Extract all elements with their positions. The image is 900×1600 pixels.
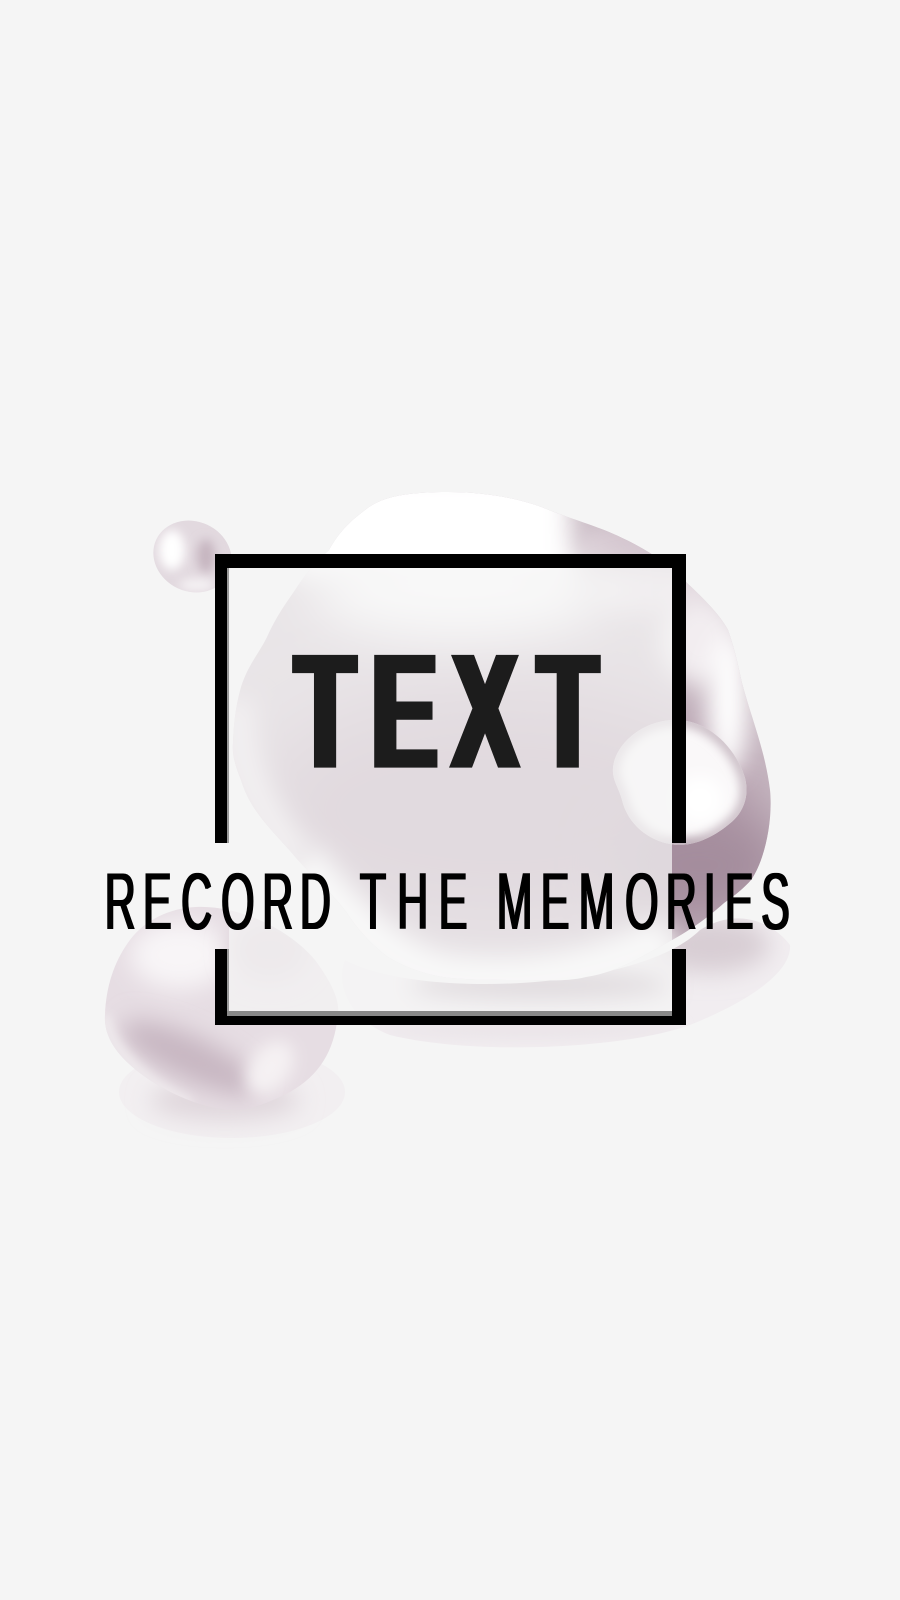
subtitle: RECORD THE MEMORIES — [105, 855, 790, 946]
bottom-left pearl stone — [105, 907, 336, 1100]
large pearl blob — [233, 492, 771, 980]
large blob cast shadow — [372, 918, 790, 1047]
bottom-left pearl shadow — [119, 1046, 345, 1138]
title: TEXT — [295, 620, 598, 803]
infographic canvas — [105, 492, 790, 1136]
right pearl stone — [613, 720, 746, 845]
small pearl — [154, 520, 231, 592]
translucent frame panel — [229, 568, 672, 1011]
square frame — [215, 554, 686, 1025]
